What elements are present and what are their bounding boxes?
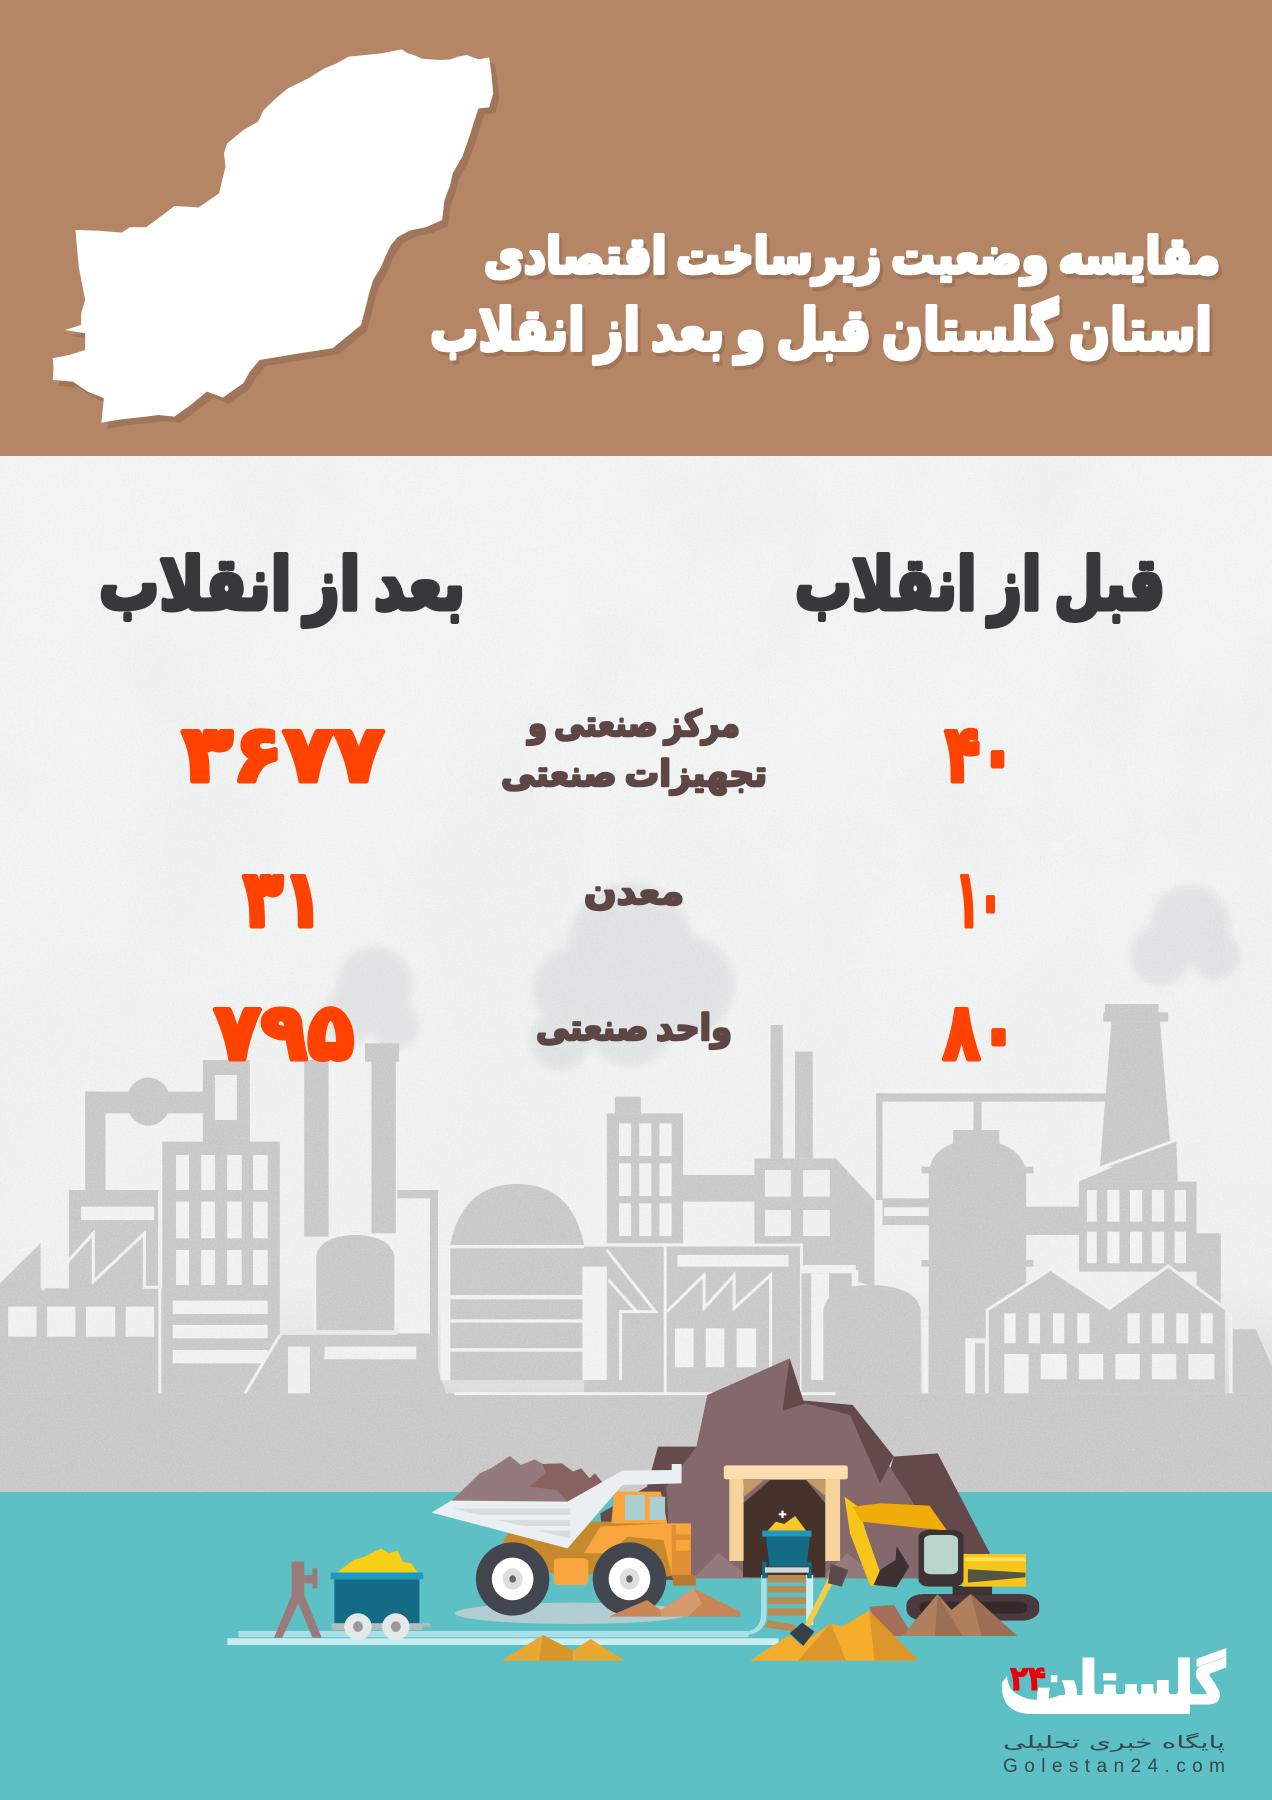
gold pile with shovel bbox=[750, 1564, 919, 1661]
gold pile foreground left bbox=[502, 1635, 625, 1661]
mining scene bbox=[227, 1358, 1039, 1661]
surveying tripod bbox=[274, 1562, 322, 1638]
factory skyline silhouette bbox=[0, 1004, 1272, 1580]
publisher logo bbox=[1002, 1649, 1225, 1777]
brown pile by excavator bbox=[869, 1605, 913, 1636]
brown pile front bbox=[902, 1594, 1017, 1636]
rails and ties bbox=[227, 1575, 813, 1645]
central dome and tower bbox=[440, 1025, 921, 1393]
right plant with tall chimney bbox=[454, 1004, 1272, 1394]
logo bowl bbox=[1002, 1676, 1190, 1714]
logo number: ۲۴ bbox=[1010, 1659, 1046, 1699]
column heading: after the revolution: بعد از انقلاب bbox=[99, 542, 465, 627]
mine cart in tunnel bbox=[762, 1511, 812, 1578]
tagline: پایگاه خبری تحلیلی bbox=[1003, 1732, 1225, 1753]
concrete background bbox=[0, 456, 1272, 1492]
dump truck bbox=[431, 1464, 696, 1616]
row: industrial centers: ۴۰ bbox=[945, 710, 1015, 800]
header banner bbox=[0, 0, 1272, 456]
row: industrial units: واحد صنعتی bbox=[536, 1008, 732, 1049]
excavator bbox=[844, 1497, 1039, 1621]
row: mines: ۳۱ bbox=[243, 855, 323, 945]
mountain bbox=[600, 1358, 990, 1580]
mine tunnel bbox=[724, 1465, 848, 1577]
row: industrial units bbox=[214, 988, 1017, 1078]
row: industrial units: ۸۰ bbox=[943, 988, 1017, 1078]
truck shadow bbox=[455, 1603, 691, 1624]
smoke clouds bbox=[322, 883, 1240, 1070]
dirt heap in truck bbox=[452, 1456, 603, 1503]
left factories bbox=[0, 1043, 446, 1393]
concrete speckle texture bbox=[0, 456, 1272, 1492]
row: industrial centers: مرکز صنعتی و bbox=[526, 704, 740, 745]
title bbox=[430, 227, 1220, 365]
column heading: before the revolution: قبل از انقلاب bbox=[795, 542, 1165, 627]
row: industrial centers bbox=[182, 704, 1015, 800]
row: industrial centers: تجهیزات صنعتی bbox=[501, 754, 767, 795]
row: industrial units: ۷۹۵ bbox=[214, 988, 354, 1078]
row: mines bbox=[243, 855, 1002, 945]
map of Golestan province bbox=[53, 49, 493, 423]
publisher logo: گلستان bbox=[1035, 1649, 1225, 1717]
row: industrial centers: ۳۶۷۷ bbox=[182, 710, 384, 800]
website: Golestan24.com bbox=[1003, 1756, 1225, 1777]
teal ground bbox=[0, 1492, 1272, 1800]
ore cart bbox=[331, 1548, 430, 1640]
row: mines: معدن bbox=[584, 872, 684, 913]
text: ۱۰ bbox=[956, 855, 1002, 945]
brown dirt pile near truck bbox=[609, 1588, 740, 1617]
